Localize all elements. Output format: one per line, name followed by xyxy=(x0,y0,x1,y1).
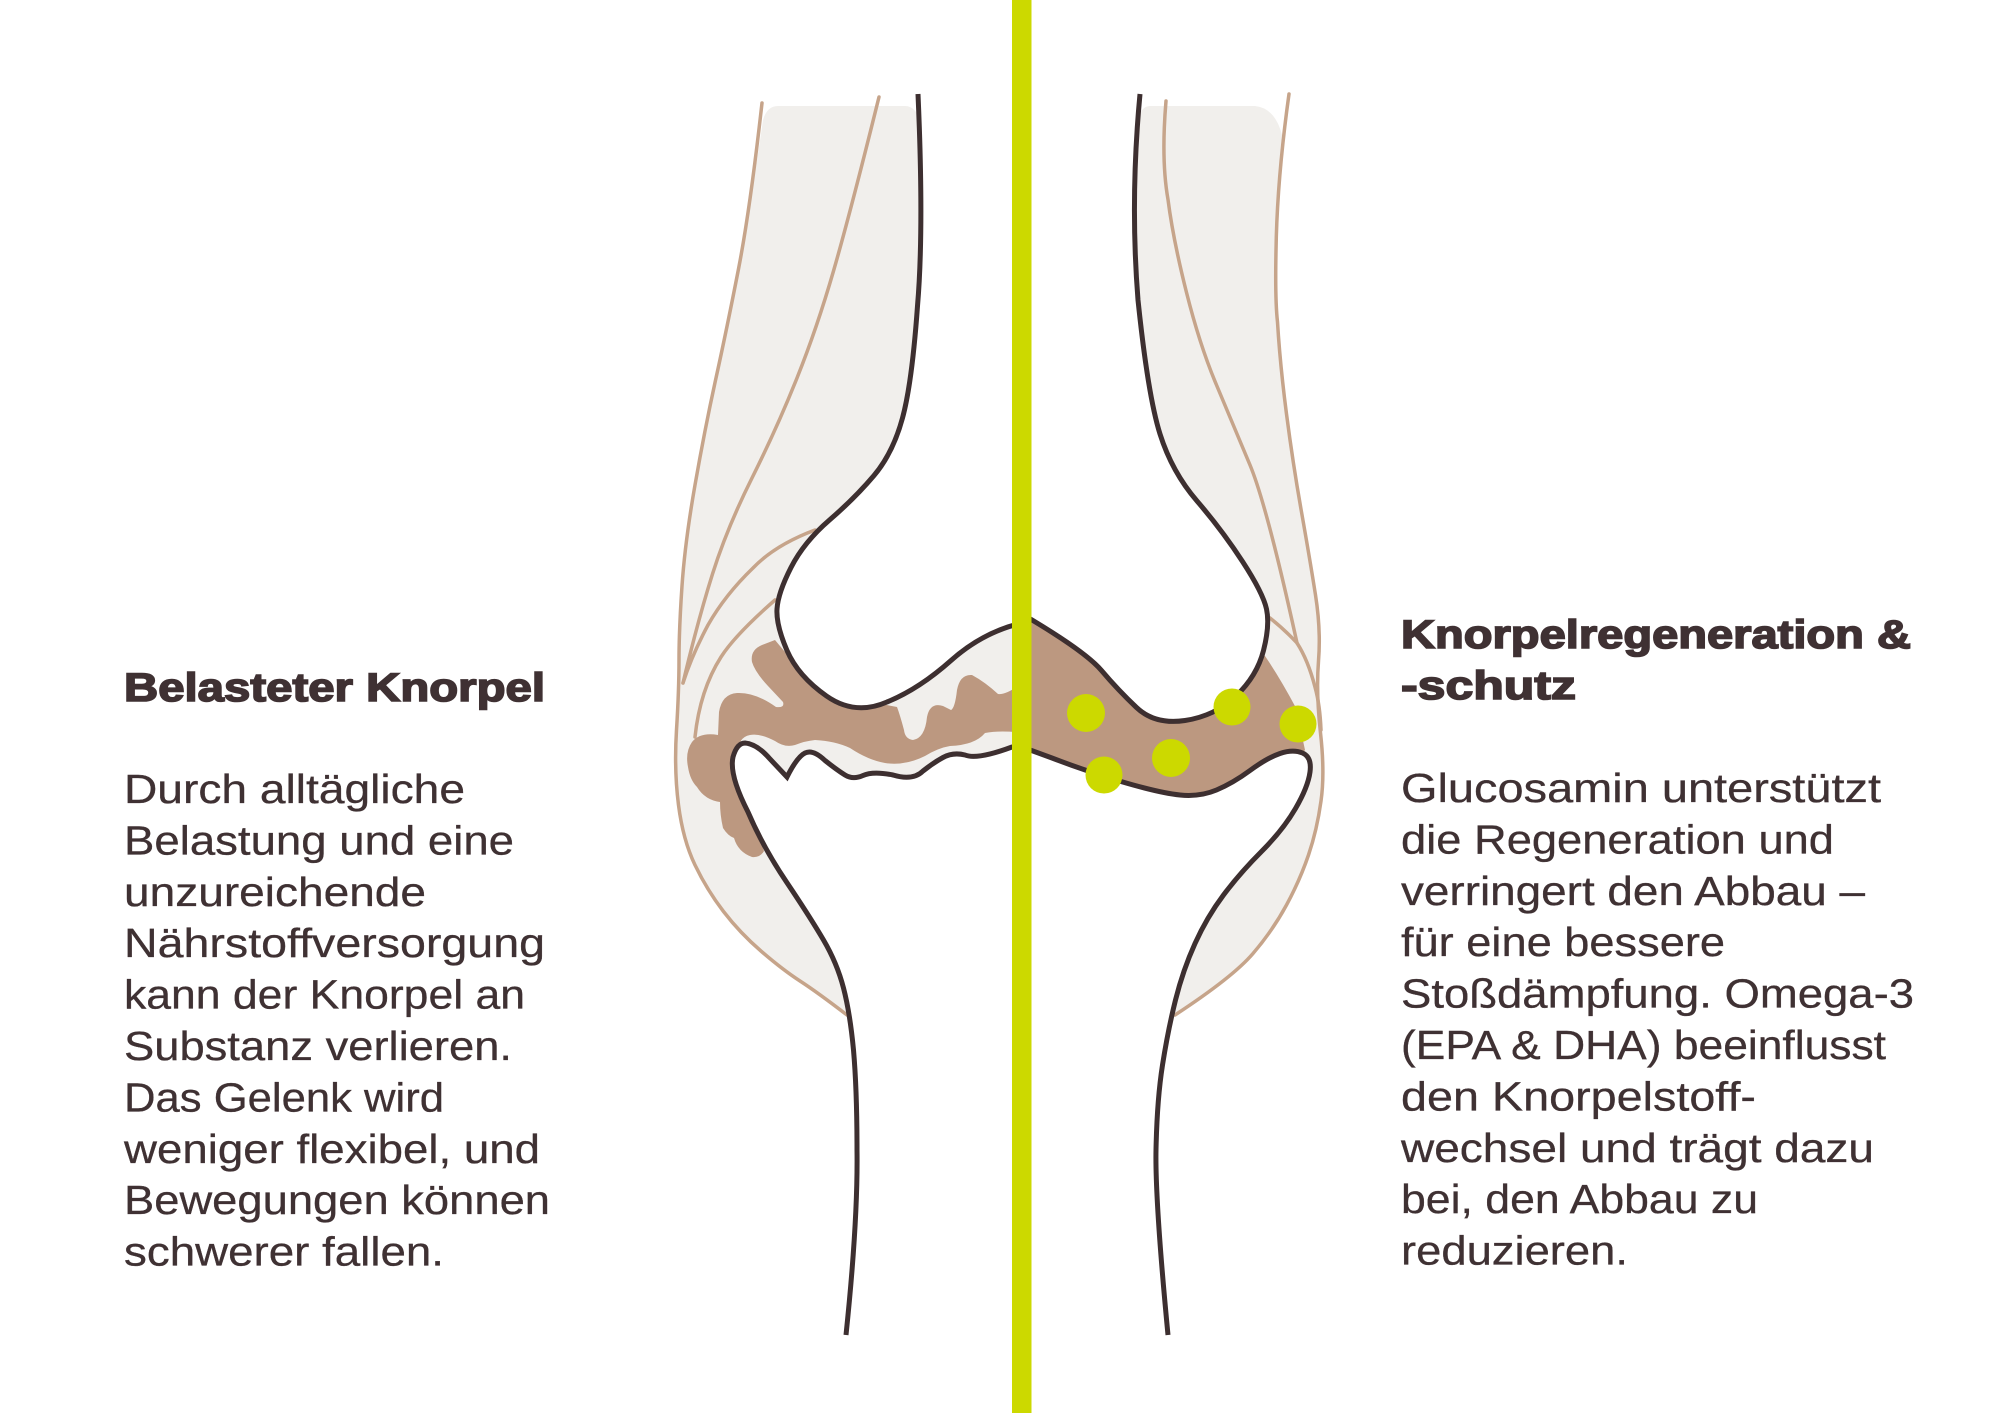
right body text: reduzieren. xyxy=(1401,1228,1628,1274)
left heading: Belasteter Knorpel xyxy=(124,666,545,710)
right tendon lines xyxy=(1164,94,1323,1015)
left body text: Nährstoffversorgung xyxy=(124,920,545,966)
right heading: Knorpelregeneration & xyxy=(1401,613,1911,657)
left soft tissue fill xyxy=(676,106,1022,1015)
left tibia xyxy=(732,743,1022,1335)
green nutrient dots xyxy=(1067,688,1316,794)
right body text xyxy=(1400,765,1914,1274)
left body text: kann der Knorpel an xyxy=(124,972,525,1018)
right body text: Stoßdämpfung. Omega-3 xyxy=(1401,971,1914,1017)
left body text: Das Gelenk wird xyxy=(124,1074,444,1120)
left body text: schwerer fallen. xyxy=(124,1229,444,1275)
right body text: bei, den Abbau zu xyxy=(1401,1176,1758,1222)
knee illustration: right half, healthy cartilage xyxy=(1022,94,1323,1335)
left body text xyxy=(123,766,550,1275)
damaged cartilage xyxy=(687,640,1025,857)
knee illustration: left half, damaged cartilage xyxy=(676,94,1025,1335)
right body text: die Regeneration und xyxy=(1401,816,1834,862)
right heading: -schutz xyxy=(1401,664,1576,708)
left body text: Durch alltägliche xyxy=(124,766,465,812)
left body text: unzureichende xyxy=(124,869,426,915)
left body text: Substanz verlieren. xyxy=(124,1023,512,1069)
right body text: (EPA & DHA) beeinflusst xyxy=(1401,1022,1887,1068)
healthy cartilage xyxy=(1025,600,1305,810)
right body text: Glucosamin unterstützt xyxy=(1401,765,1882,811)
left femur xyxy=(777,94,1022,708)
right soft tissue fill xyxy=(1022,106,1323,1015)
left body text: Belastung und eine xyxy=(124,817,514,863)
right femur xyxy=(1022,94,1268,721)
right text block xyxy=(1400,613,1914,1274)
right body text: für eine bessere xyxy=(1401,919,1725,965)
left tendon lines xyxy=(676,97,879,1015)
right tibia xyxy=(1022,747,1310,1335)
left text block xyxy=(123,666,550,1275)
green centre divider xyxy=(1012,0,1032,1413)
left body text: Bewegungen können xyxy=(124,1177,550,1223)
right body text: den Knorpelstoff- xyxy=(1401,1073,1756,1119)
right body text: wechsel und trägt dazu xyxy=(1400,1125,1874,1171)
right heading xyxy=(1401,613,1911,708)
left body text: weniger flexibel, und xyxy=(123,1126,540,1172)
right body text: verringert den Abbau – xyxy=(1401,868,1865,914)
